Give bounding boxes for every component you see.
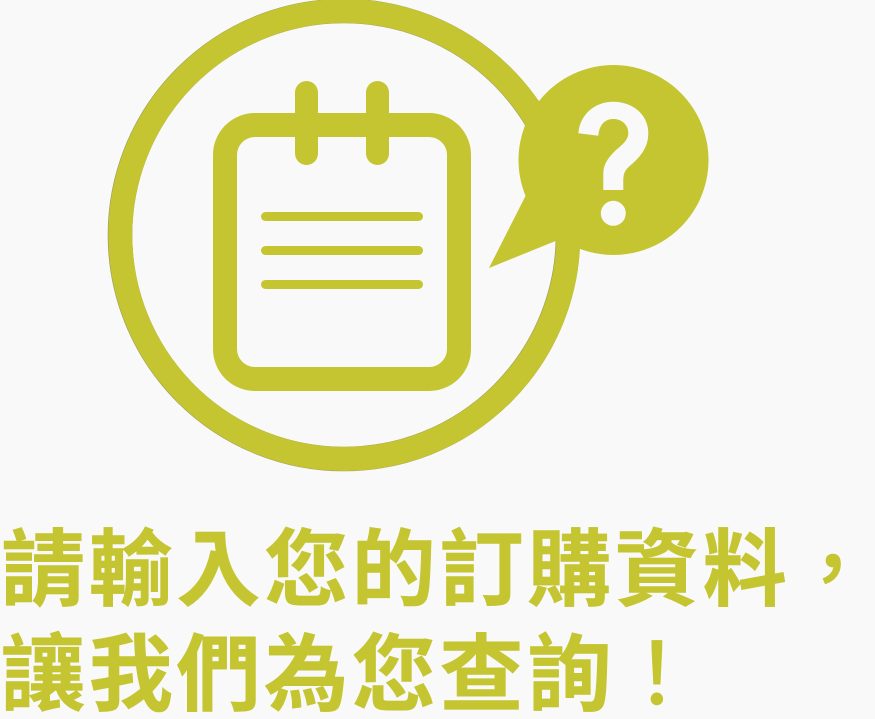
icon: question mark (578, 102, 648, 226)
icon: ring (120, 11, 568, 459)
illustration: notepad with question bubble (108, 0, 708, 472)
icon: notepad (225, 81, 459, 379)
icon: question speech bubble (489, 65, 708, 268)
heading: line 1: 請輸入您的訂購資料， (1, 523, 875, 617)
